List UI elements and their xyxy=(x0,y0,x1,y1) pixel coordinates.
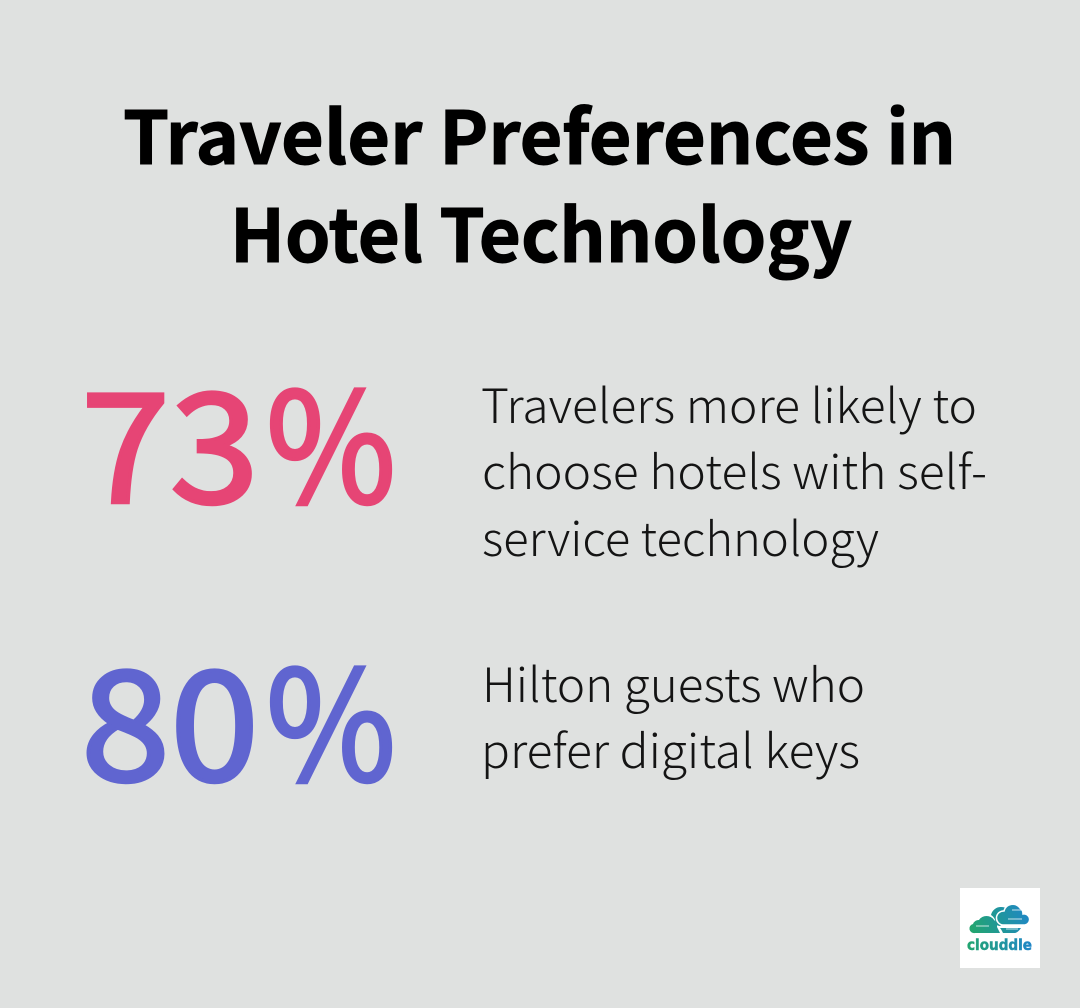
wordmark: clouddle xyxy=(967,936,1032,954)
stat: 80%: % xyxy=(266,604,396,824)
icon: clouds xyxy=(969,904,1030,933)
title xyxy=(123,80,956,284)
text: self-service technology description: Travelers more likely to xyxy=(481,368,977,437)
stat: 80%: 80 xyxy=(81,604,259,824)
text: self-service technology description xyxy=(481,368,987,570)
title: Traveler Preferences in xyxy=(123,80,956,186)
stat: 73%: 73 xyxy=(81,326,259,546)
text: digital keys description: prefer digital keys xyxy=(481,713,860,782)
stat: 73%: % xyxy=(266,326,396,546)
text: self-service technology description: choose hotels with self- xyxy=(482,434,987,503)
text: self-service technology description: service technology xyxy=(482,501,879,570)
logo: clouddle xyxy=(960,888,1040,968)
text: digital keys description: Hilton guests who xyxy=(482,647,865,716)
stat: 73% xyxy=(81,326,396,546)
title: Hotel Technology xyxy=(230,178,852,284)
stat: 80% xyxy=(81,604,396,824)
text: digital keys description xyxy=(481,647,865,782)
